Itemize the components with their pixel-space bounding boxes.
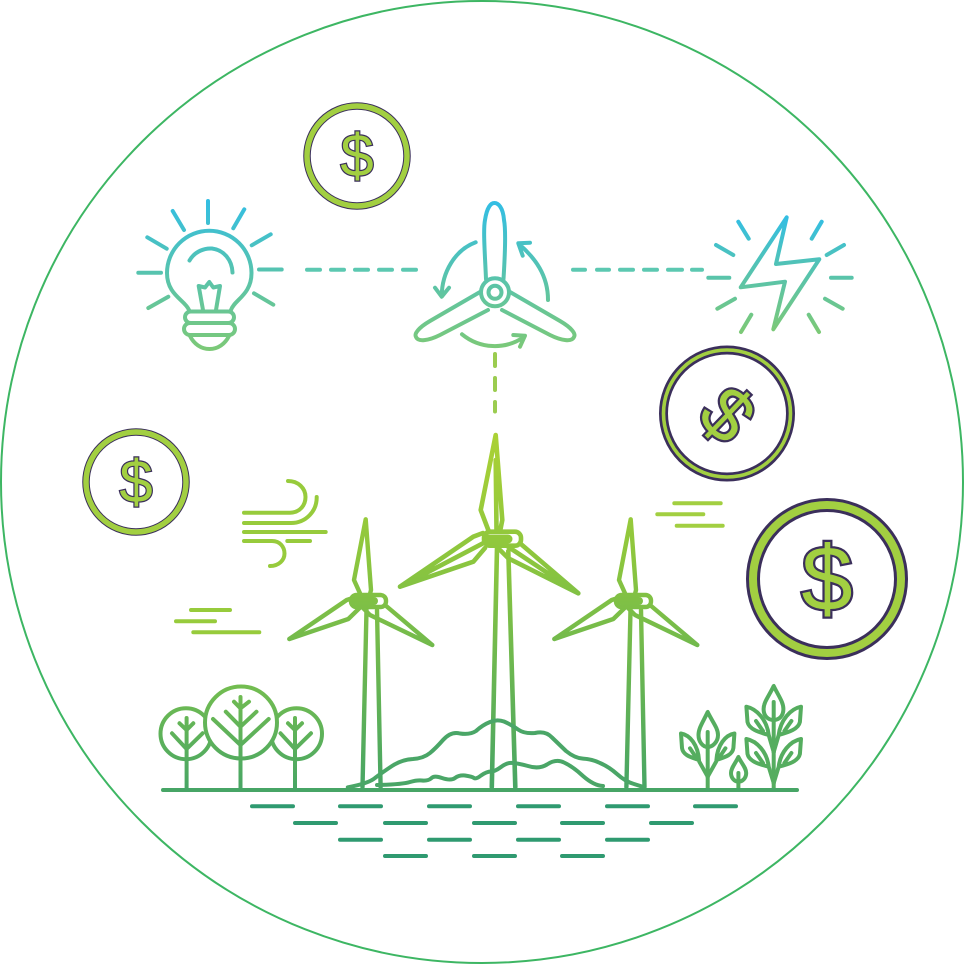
wind turbine: right — [554, 519, 697, 787]
icon: rotating turbine fan — [416, 203, 574, 347]
icon: light bulb — [138, 201, 282, 349]
water ripples — [252, 806, 736, 856]
plants — [681, 686, 801, 790]
dashed connector: fan to lightning — [573, 268, 702, 272]
speed lines: left — [176, 610, 259, 632]
coin: large right — [753, 505, 901, 653]
coin: top — [307, 106, 407, 206]
wind turbine: left — [289, 519, 432, 787]
coin: left: $ — [119, 448, 153, 515]
dashed connector: bulb to fan — [307, 268, 416, 272]
coin: large right: $ — [801, 528, 853, 630]
ground line — [163, 788, 797, 792]
hills — [348, 720, 642, 787]
coin: top: $ — [340, 122, 374, 189]
speed lines: right — [657, 503, 723, 526]
coin: middle right tilted: $ — [684, 370, 772, 459]
dashed connector: turbines to fan — [493, 354, 497, 412]
icon: wind gust — [244, 481, 326, 566]
wind turbine: center — [400, 435, 578, 787]
coin: middle right tilted — [664, 350, 790, 477]
icon: lightning bolt — [708, 217, 852, 332]
coin: left — [86, 432, 186, 532]
trees — [160, 686, 322, 790]
